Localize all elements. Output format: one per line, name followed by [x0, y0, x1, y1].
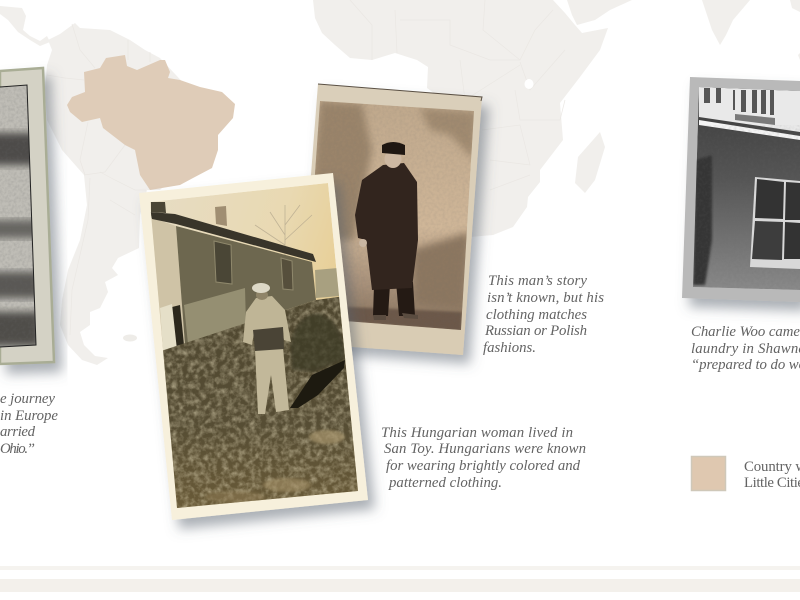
- photo: man in long coat: [298, 84, 482, 355]
- map: Lake Victoria: [524, 79, 534, 89]
- caption: man's story: This man’s story: [488, 273, 587, 289]
- backdrop brick wall: [306, 101, 372, 240]
- doorway: [172, 305, 184, 348]
- caption: man's story: fashions.: [483, 340, 536, 356]
- sash: [253, 327, 284, 351]
- window: [750, 177, 800, 269]
- eave: [699, 120, 800, 140]
- map: India: [702, 0, 750, 45]
- face: [256, 292, 268, 300]
- caption: man's story: clothing matches: [486, 307, 587, 323]
- fur hat: [382, 142, 405, 155]
- caption: Hungarian woman: for wearing brightly colored and: [386, 458, 581, 474]
- window left: [214, 241, 232, 284]
- map: South America: [45, 23, 200, 365]
- house side wall: [150, 217, 185, 350]
- map: Falkland Islands: [123, 334, 137, 342]
- blouse: [243, 296, 291, 345]
- balusters: [704, 88, 774, 115]
- balcony rail: [735, 114, 775, 125]
- engraving inner border: [0, 85, 36, 347]
- caption: engraving journey: e journey: [0, 391, 55, 407]
- laundry photo mat: [682, 77, 800, 302]
- caption: engraving journey: [0, 391, 58, 457]
- ground: [158, 296, 360, 510]
- window frame: [750, 177, 800, 269]
- trousers: [255, 348, 289, 414]
- chimney: [215, 206, 227, 226]
- bush: [290, 314, 345, 372]
- man photo top edge: [318, 84, 482, 101]
- light patches: [309, 430, 345, 444]
- window right: [281, 258, 293, 290]
- head scarf: [252, 283, 270, 293]
- legend label: [744, 459, 800, 491]
- caption: engraving journey: in Europe: [0, 408, 58, 424]
- caption: man's story: isn’t known, but his: [487, 290, 604, 306]
- cast shadow: [290, 360, 345, 408]
- white post: [160, 304, 177, 350]
- caption: engraving journey: Ohio.”: [0, 441, 35, 457]
- caption: Hungarian woman: San Toy. Hungarians were known: [384, 441, 586, 457]
- map: Central America: [0, 6, 50, 46]
- caption: Charlie Woo: Charlie Woo came: [691, 324, 800, 340]
- woman figure: [243, 283, 291, 414]
- house main wall: [176, 226, 316, 345]
- legs: [373, 282, 415, 316]
- laundry photo image: [690, 87, 800, 293]
- caption: Hungarian woman: [381, 425, 586, 491]
- footer bars: [0, 566, 800, 592]
- photo: Charlie Woo's laundry: [682, 77, 800, 302]
- caption: man's story: [483, 273, 604, 356]
- dark corner: [151, 202, 166, 213]
- man photo image: [314, 101, 474, 330]
- face: [384, 154, 402, 168]
- lower wall light boards: [184, 288, 246, 344]
- caption: Hungarian woman: This Hungarian woman lived in: [381, 425, 573, 441]
- caption: Hungarian woman: patterned clothing.: [388, 475, 502, 491]
- engraving artwork: [0, 86, 36, 346]
- backdrop foliage: [420, 108, 476, 160]
- caption: man's story: Russian or Polish: [484, 323, 587, 339]
- balcony: [699, 87, 800, 132]
- map: Arabian Peninsula: [567, 0, 632, 25]
- world map: [0, 0, 800, 365]
- coat: [355, 163, 418, 290]
- map: Brazil highlighted: [67, 55, 235, 190]
- shoes: [373, 313, 418, 320]
- engraving frame: [0, 68, 54, 364]
- lumber pile: [315, 268, 340, 298]
- map: Africa: [313, 0, 608, 237]
- backdrop bushes: [412, 232, 470, 310]
- woman photo image: [150, 183, 365, 515]
- house roof: [150, 212, 316, 262]
- map: South America borders: [47, 24, 150, 335]
- man photo card: [298, 84, 482, 355]
- map: Madagascar: [575, 132, 605, 193]
- woman photo card: [139, 173, 368, 520]
- dark shadow column: [693, 155, 712, 285]
- caption: engraving journey: arried: [0, 424, 36, 440]
- caption: Charlie Woo: [691, 324, 800, 373]
- floor: [348, 306, 462, 330]
- map: Sri Lanka area: [790, 0, 800, 60]
- bare tree: [254, 204, 312, 255]
- man figure: [355, 142, 418, 320]
- photo: framed engraving: [0, 68, 54, 364]
- hand: [359, 239, 367, 247]
- photo: Hungarian woman by house: [139, 173, 368, 520]
- window panes: [755, 179, 784, 219]
- map: Africa borders: [350, 0, 565, 190]
- legend swatch: [692, 456, 726, 490]
